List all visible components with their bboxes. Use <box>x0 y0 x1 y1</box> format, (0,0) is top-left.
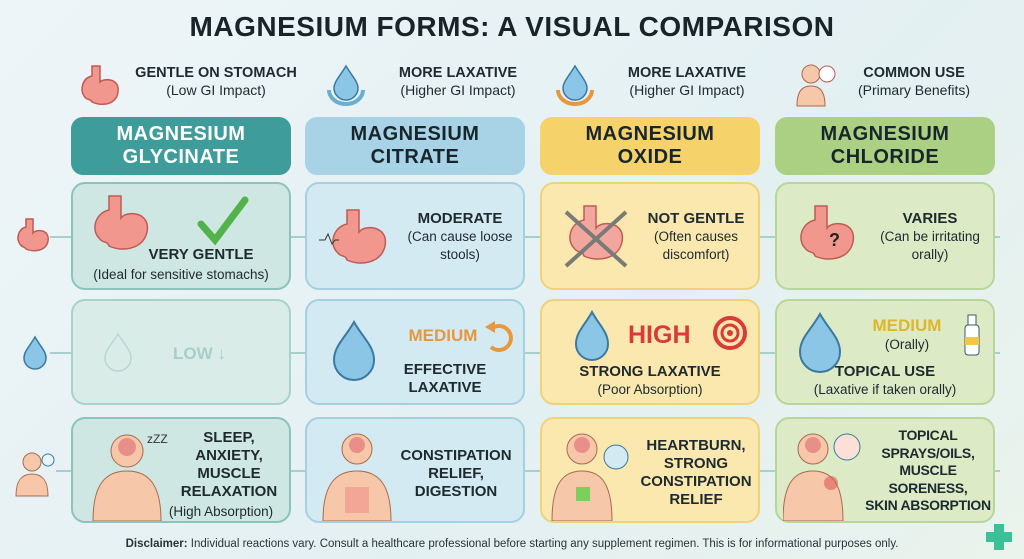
icon: stomach question: ? <box>829 230 840 250</box>
row 1 oxide <box>540 182 760 290</box>
row 3 glycinate: MUSCLE <box>197 465 261 482</box>
row 3 chloride: SPRAYS/OILS, <box>881 444 975 460</box>
header: oxide: MAGNESIUM <box>586 123 714 145</box>
icon: stomach <box>81 65 119 105</box>
header: oxide <box>540 117 760 175</box>
icon: person <box>796 64 836 106</box>
row 2 citrate: LAXATIVE <box>408 379 482 396</box>
header: citrate: MAGNESIUM <box>351 123 479 145</box>
header: chloride: CHLORIDE <box>831 146 939 168</box>
row 3 oxide: CONSTIPATION <box>640 473 752 490</box>
icon: red spiral <box>713 316 747 350</box>
row 1 chloride: VARIES <box>903 210 957 227</box>
icon: stomach with check <box>94 195 248 250</box>
row icon: person <box>16 452 54 496</box>
row 3 glycinate: (High Absorption) <box>169 504 273 519</box>
row 3 oxide: HEARTBURN, <box>646 437 746 454</box>
row 1 citrate: (Can cause loose stools) <box>407 229 513 262</box>
header: chloride: MAGNESIUM <box>821 123 949 145</box>
label: more laxative citrate: (Higher GI Impact) <box>400 82 516 98</box>
row 2 citrate: MEDIUM <box>409 326 477 345</box>
row 3 oxide <box>540 417 760 523</box>
label: more laxative oxide: (Higher GI Impact) <box>629 82 745 98</box>
row 3 chloride: MUSCLE <box>899 462 957 478</box>
row 1 citrate: MODERATE <box>418 210 502 227</box>
label: common use <box>796 64 970 106</box>
header: glycinate: GLYCINATE <box>123 146 239 168</box>
row 1 glycinate <box>71 182 291 290</box>
row 3 glycinate: ANXIETY, <box>195 447 263 464</box>
row 1 chloride: (Can be irritating orally) <box>880 229 980 262</box>
row 2 citrate: EFFECTIVE <box>404 361 486 378</box>
row 2 oxide: STRONG LAXATIVE <box>579 363 721 380</box>
row 2 chloride: TOPICAL USE <box>835 363 935 380</box>
title: MAGNESIUM FORMS: A VISUAL COMPARISON <box>190 11 834 42</box>
label: common use: (Primary Benefits) <box>858 82 970 98</box>
row 3 chloride <box>775 417 995 523</box>
row 2 chloride: MEDIUM <box>873 316 941 335</box>
icon: stomach <box>319 209 386 264</box>
row 2 glycinate <box>71 299 291 405</box>
row 3 oxide: RELIEF <box>669 491 723 508</box>
icon: person stomach <box>552 434 628 521</box>
row 3 glycinate: RELAXATION <box>181 483 277 500</box>
row 3 citrate: DIGESTION <box>415 483 497 500</box>
label: more laxative citrate <box>327 64 517 106</box>
disclaimer: Disclaimer: Individual reactions vary. Consult a healthcare professional before starting any supplement regimen. This is for informational purposes only. <box>126 538 898 550</box>
row 1 citrate <box>305 182 525 290</box>
row 2 oxide: HIGH <box>628 321 690 349</box>
row 2 chloride: (Orally) <box>885 337 929 352</box>
row 2 glycinate: LOW ↓ <box>173 344 226 363</box>
label: more laxative oxide: MORE LAXATIVE <box>628 65 746 81</box>
row icon: stomach <box>17 218 49 252</box>
row 1 oxide: (Often causes discomfort) <box>654 229 738 262</box>
header: glycinate <box>71 117 291 175</box>
row 2 oxide: (Poor Absorption) <box>597 382 703 397</box>
row 1 glycinate: VERY GENTLE <box>148 246 254 263</box>
icon: faded drop <box>104 332 132 372</box>
icon: drop <box>575 310 609 361</box>
row 2 chloride <box>775 299 995 405</box>
icon: drop <box>799 312 841 373</box>
row 1 oxide: NOT GENTLE <box>648 210 744 227</box>
icon: stomach crossed <box>564 205 628 268</box>
row 3 oxide: STRONG <box>664 455 728 472</box>
icon: person sleeping <box>92 432 168 521</box>
row 2 oxide <box>540 299 760 405</box>
label: more laxative oxide <box>556 64 746 106</box>
label: common use: COMMON USE <box>863 65 965 81</box>
row 2 chloride: (Laxative if taken orally) <box>814 382 956 397</box>
icon: logo cross <box>986 524 1012 550</box>
label: gentle on stomach: (Low GI Impact) <box>166 82 266 98</box>
icon: person shoulder <box>783 434 860 521</box>
row 3 glycinate: SLEEP, <box>203 429 255 446</box>
header: oxide: OXIDE <box>618 146 682 168</box>
icon: spray bottle <box>964 314 980 356</box>
header: citrate <box>305 117 525 175</box>
row 3 chloride: TOPICAL <box>898 427 958 443</box>
label: gentle on stomach <box>81 65 297 105</box>
row 1 chloride <box>775 182 995 290</box>
icon: drop <box>327 64 365 106</box>
row 3 citrate <box>305 417 525 523</box>
row 3 citrate: CONSTIPATION <box>400 447 512 464</box>
header: glycinate: MAGNESIUM <box>117 123 245 145</box>
icon: drop orange <box>556 64 594 106</box>
icon: drop <box>333 320 375 381</box>
row 1 glycinate: (Ideal for sensitive stomachs) <box>93 267 269 282</box>
row 3 glycinate <box>71 417 291 523</box>
row 3 citrate: RELIEF, <box>428 465 484 482</box>
row 3 chloride: SORENESS, <box>888 480 968 496</box>
icon: person digestion <box>322 434 392 521</box>
icon: stomach question <box>800 205 854 260</box>
row 3 chloride: SKIN ABSORPTION <box>865 497 991 513</box>
row icon: drop <box>23 336 47 370</box>
icon: person sleeping: zZZ <box>147 432 168 446</box>
label: gentle on stomach: GENTLE ON STOMACH <box>135 65 297 81</box>
row 2 citrate <box>305 299 525 405</box>
header: citrate: CITRATE <box>371 146 459 168</box>
label: more laxative citrate: MORE LAXATIVE <box>399 65 517 81</box>
icon: orange arrow <box>485 321 513 352</box>
header: chloride <box>775 117 995 175</box>
